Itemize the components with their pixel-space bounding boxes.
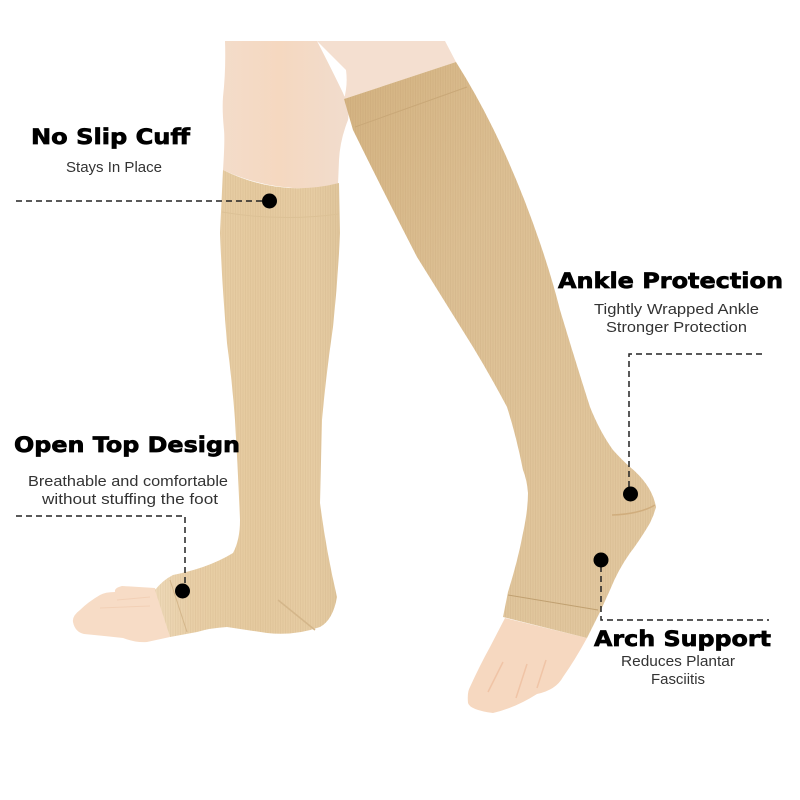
leader line bbox=[629, 354, 762, 488]
heading: No Slip Cuff: No Slip Cuff bbox=[31, 125, 191, 149]
callout: Arch Support bbox=[594, 552, 771, 688]
text: ankle description: Stronger Protection bbox=[606, 319, 747, 336]
text: arch description: Fasciitis bbox=[651, 671, 705, 688]
text: arch description: Reduces Plantar bbox=[621, 653, 735, 670]
text: ankle description: Tightly Wrapped Ankle bbox=[594, 301, 759, 318]
photo: right leg skin bbox=[317, 41, 456, 99]
text: Stays In Place: Stays In Place bbox=[66, 159, 162, 176]
photo: right foot skin bbox=[468, 618, 587, 713]
heading: Ankle Protection: Ankle Protection bbox=[558, 269, 783, 293]
photo: left foot skin bbox=[73, 586, 170, 642]
leader line bbox=[16, 516, 185, 584]
photo: left stocking bbox=[155, 170, 340, 637]
callout: No Slip Cuff bbox=[16, 125, 277, 208]
text: breathable description: Breathable and comfortable bbox=[28, 473, 228, 490]
heading: Arch Support: Arch Support bbox=[594, 627, 771, 651]
heading: Open Top Design: Open Top Design bbox=[14, 433, 240, 457]
photo: left leg skin bbox=[223, 41, 348, 188]
marker dot bbox=[594, 552, 608, 568]
leader line bbox=[601, 566, 769, 620]
marker dot bbox=[175, 584, 190, 598]
callout: Open Top Design bbox=[14, 433, 240, 598]
photo: right stocking bbox=[344, 62, 656, 638]
leader line bbox=[16, 200, 263, 202]
marker dot bbox=[623, 486, 638, 502]
text: breathable description: without stuffing the foot bbox=[41, 491, 219, 508]
marker dot bbox=[262, 194, 277, 208]
callout: Ankle Protection bbox=[558, 269, 783, 502]
